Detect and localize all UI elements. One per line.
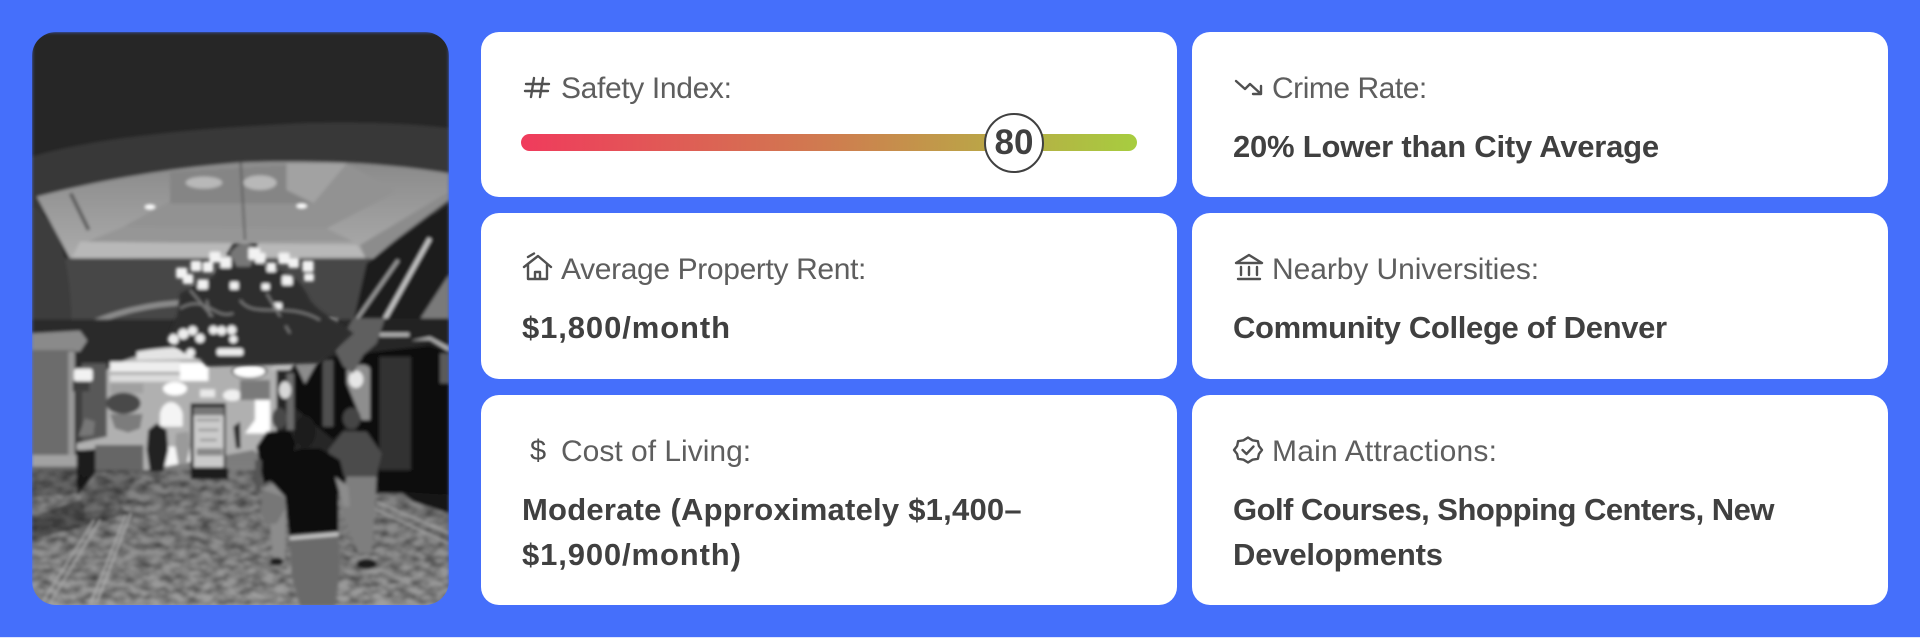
icon: university building [1234, 254, 1264, 280]
ceiling [37, 161, 449, 263]
value: universities: Community College of Denver [1233, 310, 1667, 345]
value: cost of living: Moderate (Approximately $1,400– [522, 492, 1022, 527]
label: safety index: Safety Index: [561, 72, 732, 105]
label: average property rent: Average Property Rent: [561, 253, 866, 286]
label: main attractions: Main Attractions: [1272, 435, 1497, 468]
carpet texture [32, 470, 449, 605]
arch band [32, 123, 449, 213]
score marker [984, 113, 1044, 173]
awnings [272, 362, 296, 373]
sign stand [191, 403, 226, 479]
value: cost of living: $1,900/month) [522, 537, 742, 572]
value: main attractions: Golf Courses, Shopping Centers, New [1233, 492, 1774, 527]
planter and counter [106, 393, 141, 414]
second column and first column [82, 363, 107, 443]
panel: nearby universities [1192, 213, 1888, 379]
carpet base [32, 450, 449, 610]
panel: safety index [481, 32, 1177, 197]
panel: average property rent [481, 213, 1177, 379]
right shops [293, 343, 449, 495]
value: main attractions [1233, 492, 1774, 572]
bright hall [107, 348, 277, 470]
awning stem [287, 373, 294, 430]
label: crime rate: Crime Rate: [1272, 72, 1427, 105]
man left [272, 408, 287, 429]
lower arch [94, 298, 180, 322]
value: crime rate: 20% Lower than City Average [1233, 129, 1659, 164]
icon: dollar sign: $ [530, 435, 546, 467]
slider: safety score 80 [521, 113, 1137, 173]
hanging oval sign [231, 363, 267, 379]
upper dark band [34, 317, 351, 332]
icon: hash [524, 76, 550, 98]
score marker: 80 [995, 123, 1033, 162]
panel: crime rate [1192, 32, 1888, 197]
small people [147, 423, 168, 472]
chandelier foliage [167, 243, 353, 367]
value: cost of living [522, 492, 1022, 572]
icon: verified badge [1232, 436, 1264, 464]
icon: trending down [1234, 80, 1262, 96]
right dark block [353, 203, 449, 322]
man right [343, 408, 361, 429]
label: nearby universities: Nearby Universities: [1272, 253, 1539, 286]
man center [294, 416, 316, 448]
icon: house [522, 252, 552, 280]
back wall [32, 258, 379, 322]
panel: cost of living [481, 395, 1177, 605]
panel: main attractions [1192, 395, 1888, 605]
upper dark above awnings [377, 318, 449, 352]
value: main attractions: Developments [1233, 537, 1443, 572]
chain [241, 162, 245, 240]
gradient bar [521, 134, 1137, 151]
label: cost of living: Cost of Living: [561, 435, 751, 468]
sconce [74, 369, 93, 381]
value: rent: $1,800/month [522, 310, 731, 345]
photo: hotel shopping arcade in black and white [32, 32, 449, 605]
